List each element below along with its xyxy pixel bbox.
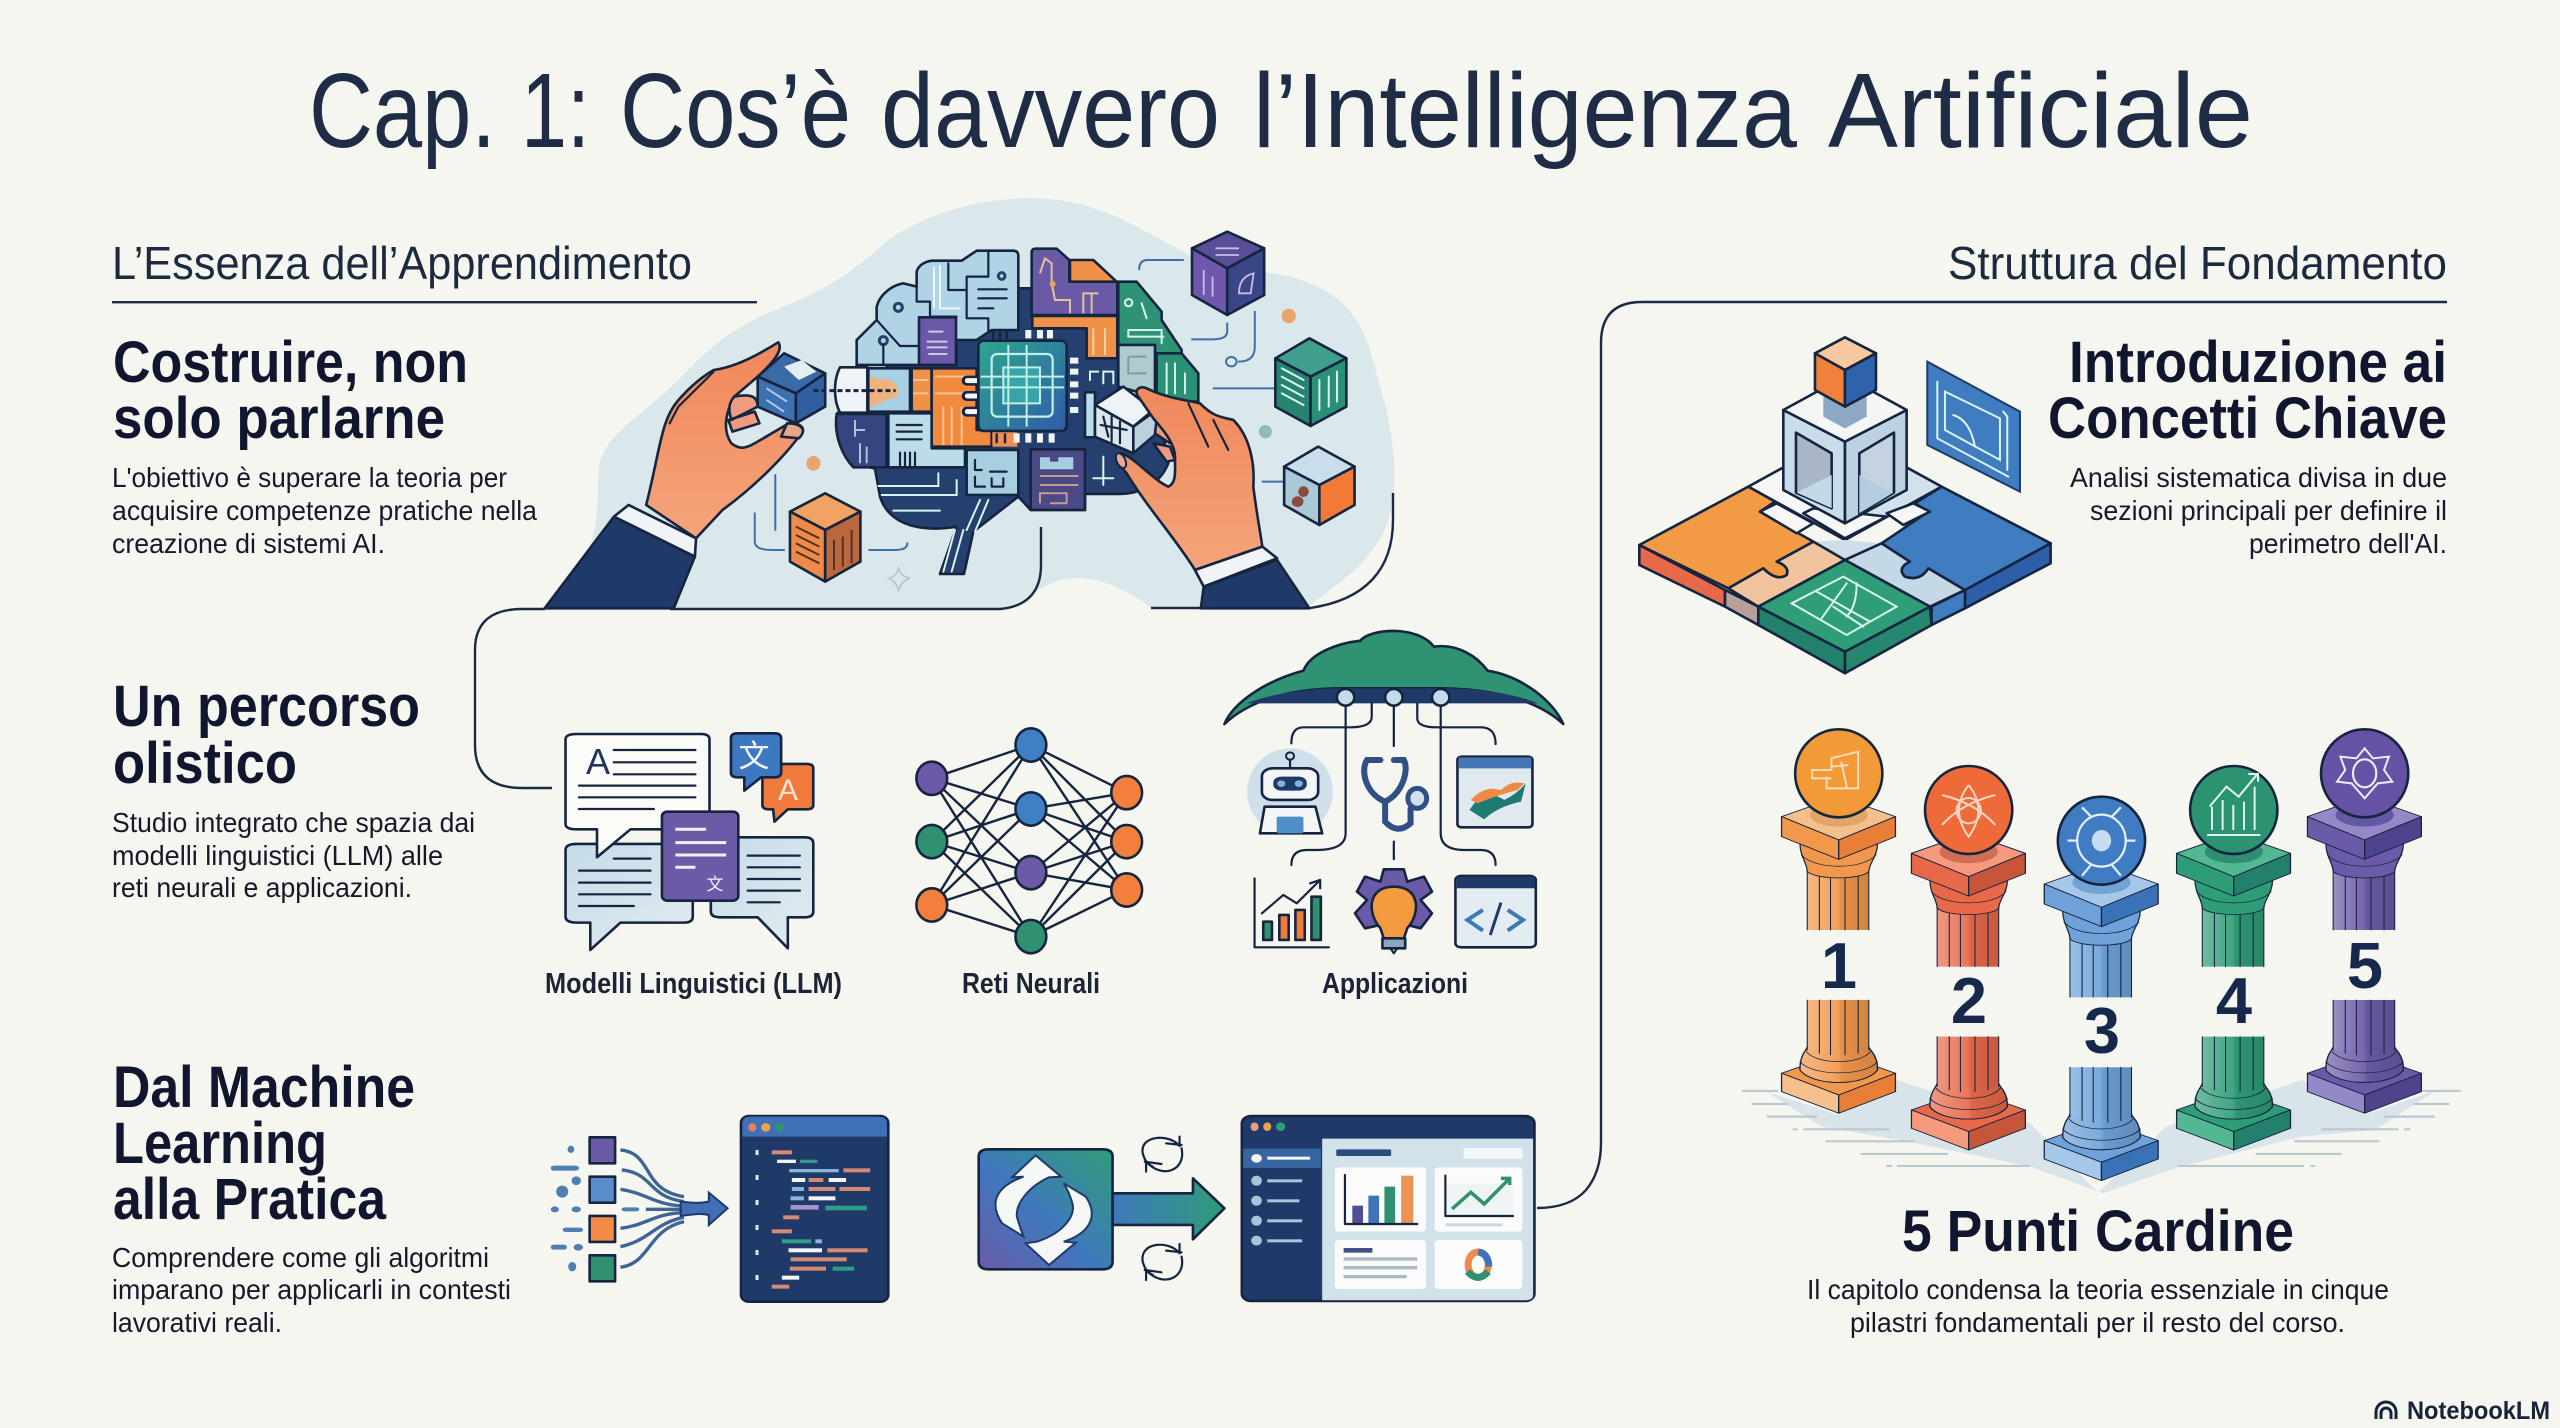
code window (1455, 876, 1536, 947)
idea gear (1355, 869, 1432, 953)
text block: Costruire, non solo parlarne: creazione di sistemi AI. (112, 528, 385, 559)
text block: Introduzione ai Concetti Chiave: Introduzione ai (2069, 330, 2447, 395)
title: 1: (521, 52, 590, 170)
central chip (978, 341, 1067, 431)
text block: Introduzione ai Concetti Chiave: perimetro dell'AI. (2249, 528, 2447, 559)
illustration: hands assembling a modular brain (543, 198, 1394, 608)
white cube (1095, 387, 1157, 453)
text block: Costruire, non solo parlarne (112, 330, 537, 559)
flow lines (620, 1150, 684, 1267)
orange tile (1639, 487, 1845, 625)
text block: Un percorso olistico: reti neurali e applicazioni. (112, 872, 412, 903)
label: Applicazioni: Applicazioni (1322, 968, 1468, 1000)
pillar 1 (1782, 729, 1895, 1113)
text block: Dal Machine Learning alla Pratica: Dal Machine (113, 1055, 415, 1120)
pillar numbers: 2 (1951, 964, 1987, 1037)
lower-left panels (836, 414, 887, 467)
text block: Introduzione ai Concetti Chiave: sezioni principali per definire il (2090, 495, 2447, 526)
text block: 5 Punti Cardine: pilastri fondamentali per il resto del corso. (1850, 1307, 2345, 1338)
navy core and stem (837, 288, 1168, 574)
sparkle (889, 568, 910, 591)
hands and sleeves (545, 342, 1309, 608)
cloud (1224, 631, 1563, 724)
pillars: five foundations (1742, 729, 2461, 1193)
ground shadow (1766, 1080, 2437, 1193)
tower (1783, 337, 1907, 523)
section heading: L'Essenza dell'Apprendimento: L’Essenza dell’Apprendimento (112, 237, 692, 289)
green blocks (1118, 282, 1182, 353)
upper blue lobes (857, 251, 1018, 367)
icon: language model chat bubbles: 文 (738, 739, 770, 774)
icon: language model chat bubbles: 文 (706, 875, 724, 894)
title: davvero (881, 52, 1220, 170)
left hand holding cube (545, 342, 896, 608)
small interlock tiles (1760, 503, 1930, 538)
backdrop, cubes and thin links (543, 198, 1394, 608)
donut (1467, 1252, 1489, 1277)
arrow (681, 1193, 728, 1225)
text block: 5 Punti Cardine: 5 Punti Cardine (1902, 1199, 2294, 1264)
title: Cap. (309, 52, 496, 170)
growth chart (1255, 878, 1329, 947)
text block: Costruire, non solo parlarne: Costruire, non (113, 330, 468, 395)
data dots (551, 1146, 639, 1271)
text block: Un percorso olistico: Un percorso (113, 674, 420, 739)
text block: Dal Machine Learning alla Pratica: alla Pratica (113, 1167, 387, 1232)
pillar numbers: 5 (2347, 929, 2383, 1002)
icon: language model chat bubbles: A (778, 774, 798, 807)
text block: Introduzione ai Concetti Chiave (2048, 330, 2447, 559)
icon: cloud with applications (1224, 631, 1563, 953)
sidebar (1243, 1149, 1321, 1246)
robot (1247, 748, 1333, 835)
orange blocks (912, 368, 932, 412)
pillar numbers: 3 (2084, 994, 2120, 1067)
cloud backdrop (543, 198, 1394, 608)
text block: Introduzione ai Concetti Chiave: Analisi sistematica divisa in due (2070, 462, 2447, 493)
title: Artificiale (1828, 52, 2253, 170)
cards (1335, 1167, 1522, 1289)
purple doc (919, 317, 956, 365)
blue tile (1845, 487, 2051, 625)
icon: neural network (916, 728, 1142, 953)
section heading: Struttura del Fondamento: Struttura del Fondamento (1948, 237, 2447, 289)
navy detail (1090, 372, 1113, 383)
cube: orange and ice (1284, 447, 1355, 525)
text block: Dal Machine Learning alla Pratica: imparano per applicarli in contesti (112, 1274, 511, 1305)
cloud wires (1291, 697, 1496, 865)
code editor (741, 1116, 888, 1302)
line chart card (1445, 1176, 1513, 1226)
icon: dashboard window (1242, 1116, 1534, 1301)
text block: Un percorso olistico: Studio integrato che spazia dai (112, 807, 475, 838)
cycle arrows (995, 1155, 1061, 1237)
text block: Un percorso olistico: olistico (113, 731, 297, 796)
text block: 5 Punti Cardine (1807, 1199, 2389, 1338)
small cycle icons (1142, 1137, 1182, 1172)
cube: purple (1192, 232, 1264, 315)
dots (806, 309, 1296, 471)
text block: Costruire, non solo parlarne: solo parlarne (113, 386, 445, 451)
icon: language model chat bubbles (566, 733, 813, 950)
text block: Un percorso olistico: modelli linguistici (LLM) alle (112, 840, 443, 871)
title: l’Intelligenza (1253, 52, 1797, 170)
title (309, 52, 2253, 170)
title: Cos’è (620, 52, 851, 170)
text block: Un percorso olistico (112, 674, 475, 903)
upper purple and orange blocks (1032, 249, 1117, 315)
pillar 2 (1911, 766, 2025, 1150)
text block: Dal Machine Learning alla Pratica: Learning (113, 1111, 327, 1176)
green tile (1758, 560, 1932, 673)
text block: 5 Punti Cardine: Il capitolo condensa la teoria essenziale in cinque (1807, 1274, 2389, 1305)
connector: pipeline to right column (1537, 302, 2447, 1208)
text block: Costruire, non solo parlarne: L'obiettivo è superare la teoria per (112, 462, 507, 493)
cube: orange (790, 493, 860, 582)
text block: Dal Machine Learning alla Pratica: lavorativi reali. (112, 1307, 282, 1338)
thin connector lines (755, 260, 1283, 550)
cube: green (1275, 338, 1346, 426)
stethoscope (1364, 760, 1411, 829)
bar chart card (1345, 1175, 1417, 1224)
pillar numbers: 1 (1821, 929, 1857, 1002)
text block: Dal Machine Learning alla Pratica: Comprendere come gli algoritmi (112, 1242, 489, 1273)
chart window (1457, 757, 1532, 827)
logo: NotebookLM: NotebookLM (2407, 1397, 2550, 1425)
pillar 5 (2307, 729, 2421, 1113)
icon: language model chat bubbles: A (586, 741, 610, 782)
blueprint panel (1927, 362, 2020, 492)
pillar 3 (2044, 797, 2158, 1181)
icon: iterative process arrow (979, 1137, 1224, 1280)
icon: data flowing into code (551, 1116, 888, 1302)
text block: Introduzione ai Concetti Chiave: Concetti Chiave (2048, 386, 2447, 451)
text block: Dal Machine Learning alla Pratica (112, 1055, 511, 1338)
label: Modelli Linguistici (LLM): Modelli Linguistici (LLM) (545, 968, 842, 1000)
pillar numbers: 4 (2216, 964, 2252, 1037)
lower lobe (878, 473, 957, 511)
pillar 4 (2177, 766, 2290, 1150)
text block: Costruire, non solo parlarne: acquisire competenze pratiche nella (112, 495, 537, 526)
right hand (1114, 387, 1262, 570)
chip pins (1017, 330, 1078, 443)
icon: isometric puzzle foundation (1639, 337, 2051, 673)
text card (1344, 1248, 1417, 1278)
connector: brain to models row (475, 493, 1393, 788)
left hand target panel (868, 368, 910, 412)
data tiles (590, 1137, 615, 1281)
bottom purple panel (1031, 449, 1085, 510)
pillar numbers (1821, 929, 2383, 1067)
label: Reti Neurali: Reti Neurali (962, 968, 1100, 1000)
right cuff and sleeve (1195, 547, 1309, 608)
brain (835, 249, 1262, 574)
central plate (1748, 468, 1845, 540)
